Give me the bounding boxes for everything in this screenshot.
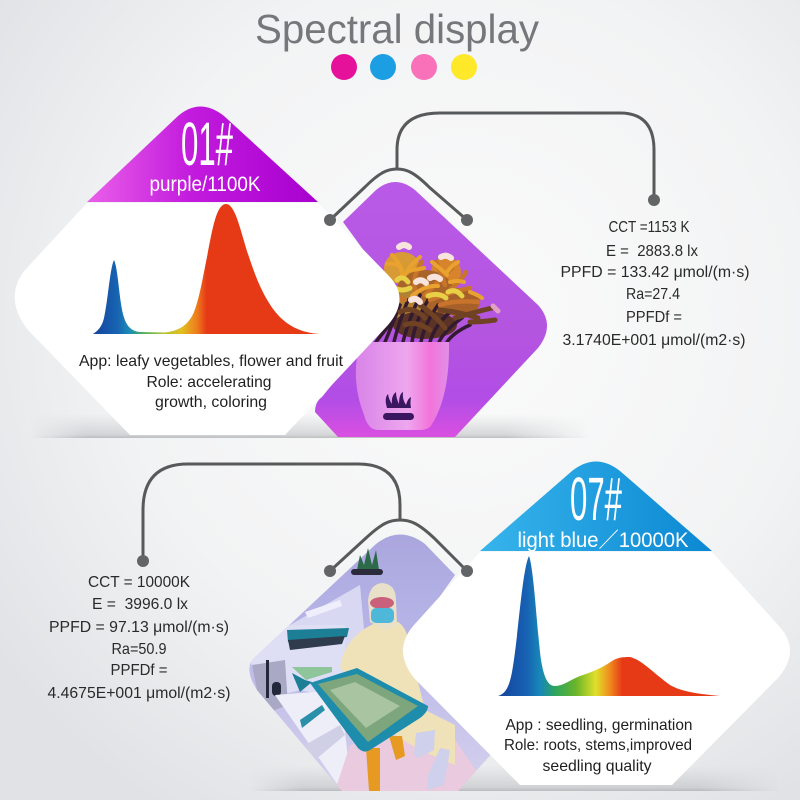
text block: 07 application: Role: roots, stems,improved: [504, 737, 692, 754]
text block: 07 measurements: PPFD = 97.13 μmol/(m·s): [49, 619, 229, 636]
connector: top row: [324, 113, 660, 226]
text block: 07 measurements: CCT = 10000K: [88, 574, 190, 591]
plant foliage: [376, 245, 498, 342]
text block: 01 application: Role: accelerating: [146, 374, 272, 391]
chart: spectrum 07: [498, 556, 720, 696]
panel: white diamond 01: [15, 203, 400, 435]
badge number 01#: 01#: [181, 110, 233, 178]
text block: 01 application: App: leafy vegetables, flower and fruit: [79, 353, 344, 370]
floor shadow: bottom row: [260, 773, 766, 791]
connector: bottom row: [137, 464, 473, 577]
panel: purple photo with plant: [315, 182, 547, 437]
badge number 07#: 07#: [570, 465, 622, 533]
floor: [337, 736, 476, 791]
pot logo: [383, 392, 414, 420]
text block: 01 measurements: 3.1740E+001 μmol/(m2·s): [562, 332, 746, 349]
text block: 07 measurements: [48, 574, 230, 702]
text block: 01 measurements: [560, 219, 750, 349]
badge: purple triangle: [87, 106, 318, 202]
text block: 07 application: seedling quality: [542, 758, 652, 775]
colour dots legend: [331, 54, 477, 80]
text block: 01 application: growth, coloring: [155, 394, 267, 411]
text block: 01 application: [79, 353, 344, 411]
wall and shelving: [250, 585, 365, 791]
seedling tray: [310, 668, 428, 752]
chart: spectrum 01: [93, 204, 320, 334]
text block: 01 measurements: Ra=27.4: [626, 286, 680, 303]
text block: 07 measurements: E = 3996.0 lx: [92, 596, 188, 613]
text block: 07 measurements: Ra=50.9: [112, 641, 167, 658]
text block: 07 measurements: 4.4675E+001 μmol/(m2·s): [48, 685, 230, 702]
worker in protective suit: [340, 583, 455, 791]
text block: 01 measurements: PPFD = 133.42 μmol/(m·s): [560, 264, 750, 281]
flower pot: [356, 342, 449, 430]
text block: 07 application: App : seedling, germination: [506, 717, 692, 734]
badge: blue triangle: [480, 462, 712, 552]
title: Spectral display: [255, 6, 539, 52]
text block: 07 measurements: PPFDf =: [110, 662, 168, 679]
floor shadow: top row: [40, 420, 578, 438]
text block: 01 measurements: PPFDf =: [626, 309, 682, 326]
badge label purple/1100K: purple/1100K: [150, 173, 260, 196]
text block: 07 application: [504, 717, 692, 775]
panel: lab photo with worker: [250, 534, 490, 791]
logo above worker: [351, 548, 383, 575]
text block: 01 measurements: CCT =1153 K: [608, 219, 690, 236]
badge label light blue 10000K: light blue／10000K: [518, 529, 688, 552]
text block: 01 measurements: E = 2883.8 lx: [606, 243, 698, 260]
panel: white diamond 07: [403, 552, 790, 785]
